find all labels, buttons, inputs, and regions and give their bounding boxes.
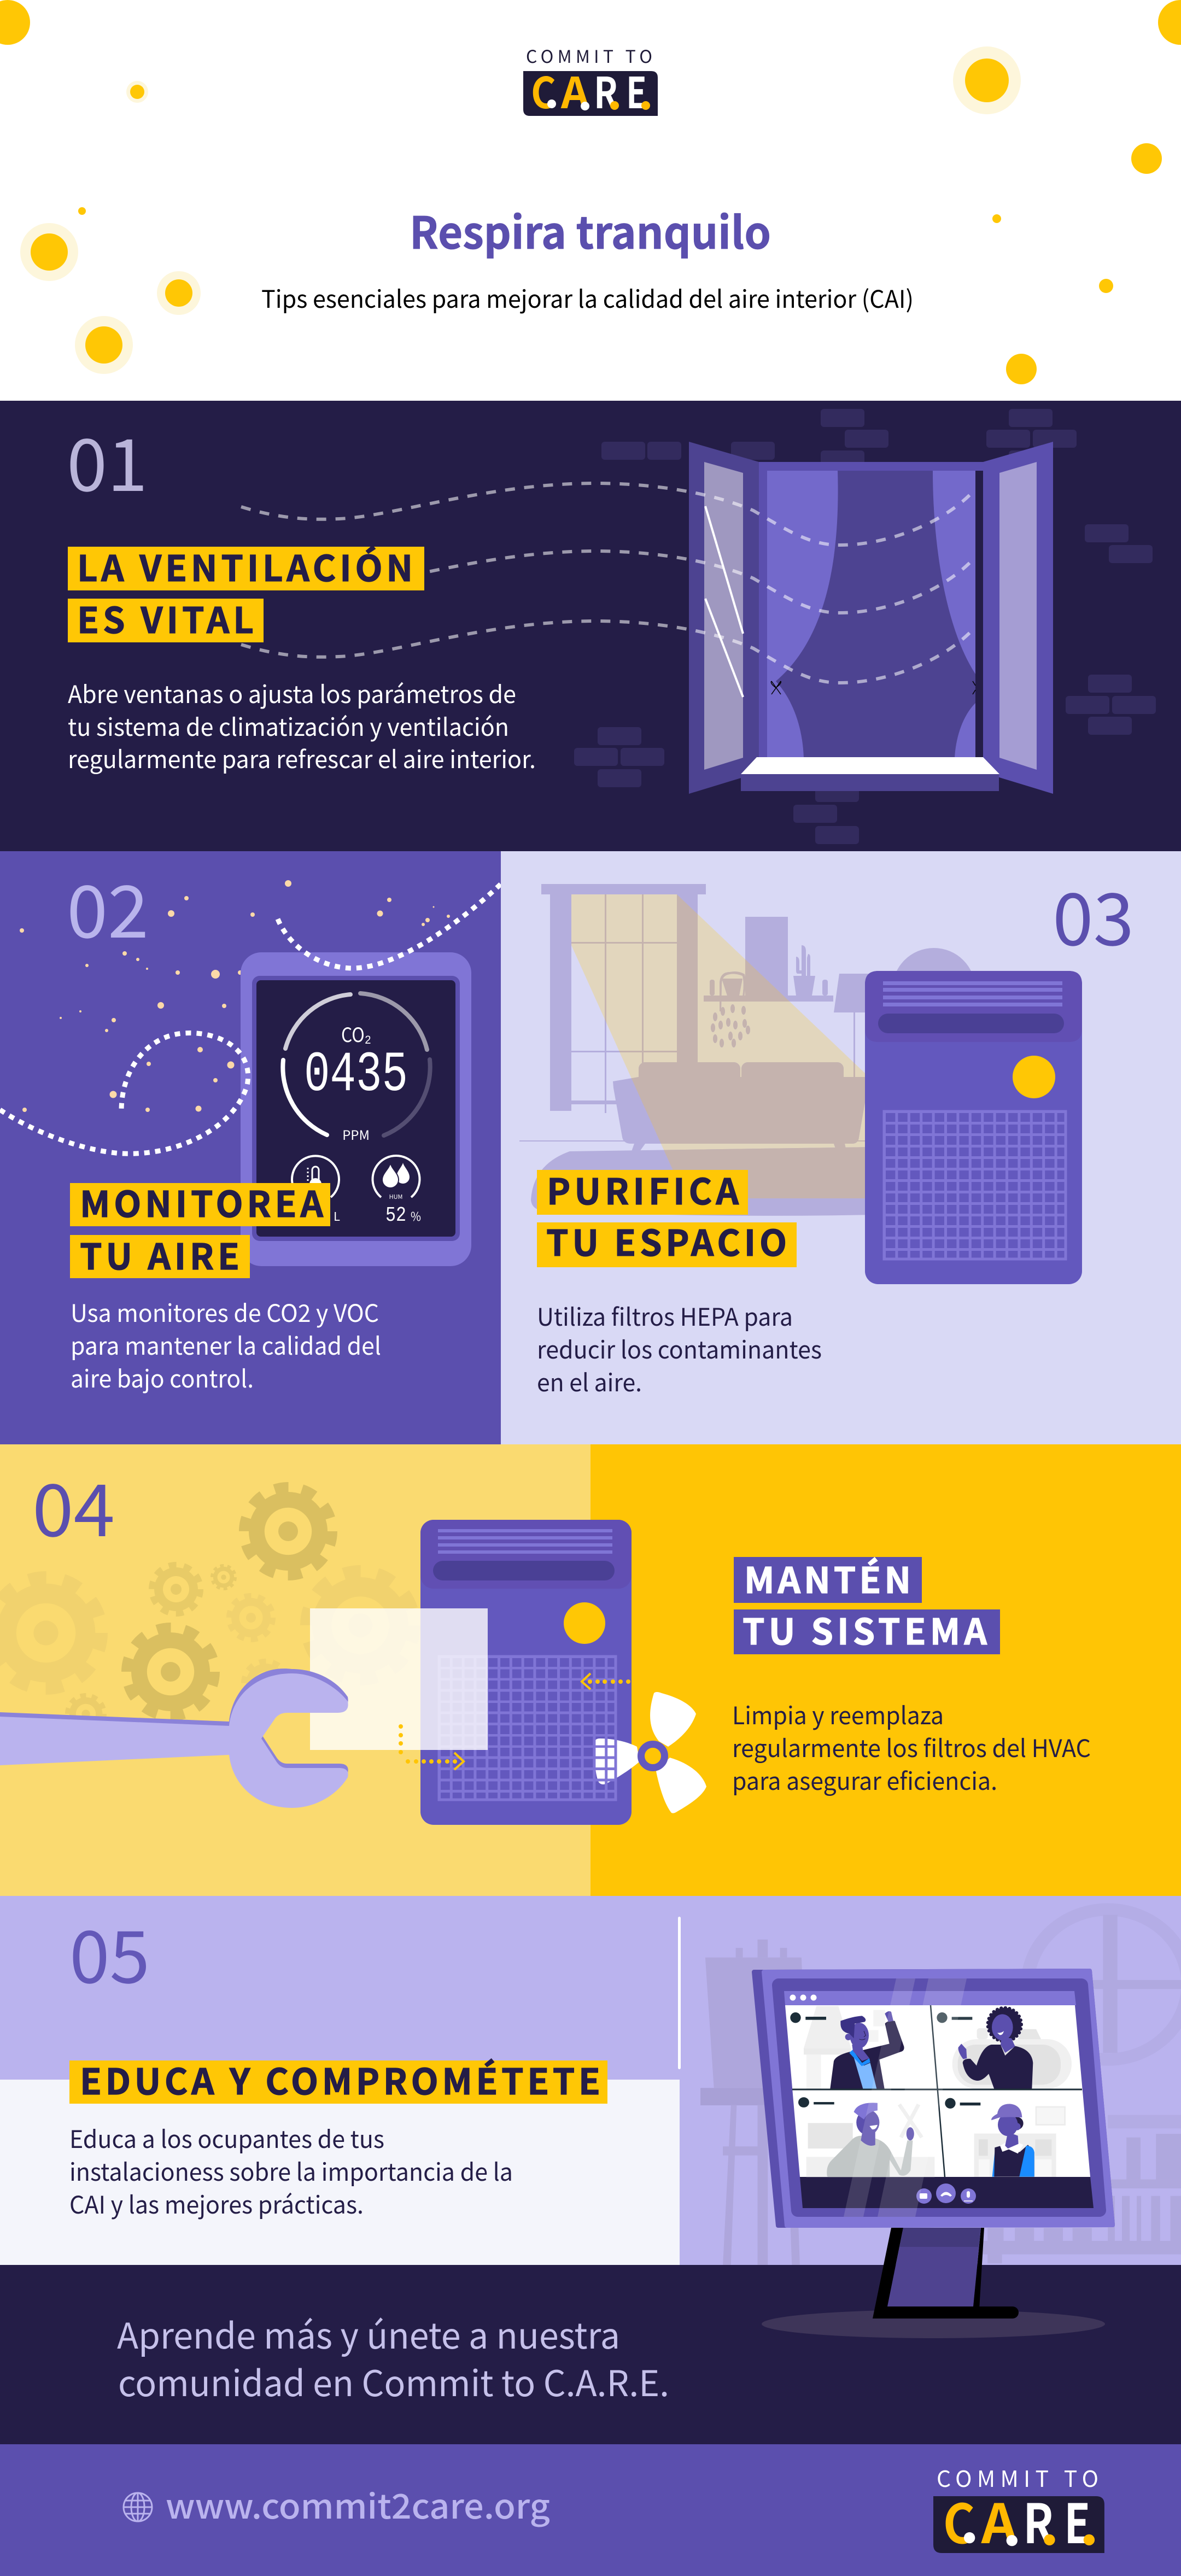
fan blades [594, 1692, 706, 1813]
PPM label: PPM [342, 1125, 370, 1144]
CO2 label: CO₂ [341, 1020, 371, 1048]
paragraph: Usa monitores de CO2 y VOC [71, 1294, 379, 1329]
paragraph: Educa a los ocupantes de tus [69, 2120, 384, 2155]
heading tag: EDUCA Y COMPROMÉTETE [80, 2053, 600, 2105]
paragraph: Utiliza filtros HEPA para [537, 1298, 793, 1333]
humidity gauge: HUM [389, 1192, 402, 1201]
paragraph: Limpia y reemplaza [732, 1696, 944, 1731]
illustration: living room silhouette [519, 884, 975, 1216]
illustration: video call monitor [754, 1971, 1113, 2226]
number 02: 02 [67, 854, 149, 959]
wrench [0, 1668, 348, 1808]
panel: 01 ventilation [0, 401, 1181, 851]
panel: 02 monitor [0, 851, 501, 1444]
icon: globe [124, 2493, 152, 2521]
panel: 04 maintenance [0, 1444, 1181, 1896]
temperature gauge: L [334, 1207, 340, 1225]
background silhouettes: easel, round window, bookshelf [700, 1910, 1181, 2265]
paragraph [68, 675, 536, 775]
heading tag line 1: MANTÉN [744, 1552, 911, 1603]
gauge arcs [283, 993, 430, 1135]
logo: Commit to CARE [933, 2461, 1104, 2559]
logo: Commit to CARE: COMMIT TO [526, 43, 652, 68]
panel: footer [0, 2444, 1181, 2576]
replacement filter sheet [310, 1608, 488, 1750]
illustration: air flow lines [241, 483, 972, 683]
participant 4 [945, 2098, 1065, 2177]
decorative yellow dots [0, 0, 1181, 384]
humidity gauge: % [411, 1207, 421, 1225]
paragraph: CAI y las mejores prácticas. [69, 2186, 364, 2221]
filter grid [438, 1655, 617, 1801]
participant 1 [790, 2006, 904, 2089]
heading tag line 1: LA VENTILACIÓN [77, 540, 413, 592]
paragraph [732, 1696, 1091, 1797]
number 05: 05 [69, 1900, 150, 2004]
dotted air trail [0, 884, 501, 1154]
website: www.commit2care.org [166, 2479, 550, 2528]
logo: Commit to CARE [523, 43, 658, 121]
screen reflection [844, 1978, 967, 2217]
paragraph [69, 2120, 513, 2221]
temperature gauge [292, 1156, 340, 1225]
paragraph: aire bajo control. [71, 1360, 254, 1395]
HVAC unit [420, 1520, 632, 1825]
text: call to action: Aprende más y únete a nuestra [117, 2308, 620, 2359]
right shutter [983, 442, 1053, 794]
paragraph: para mantener la calidad del [71, 1327, 381, 1362]
paragraph: regularmente los filtros del HVAC [732, 1729, 1091, 1764]
call controls [916, 2183, 976, 2204]
logo: Commit to CARE: COMMIT TO [937, 2461, 1098, 2493]
humidity gauge [373, 1156, 421, 1227]
paragraph: regularmente para refrescar el aire interior. [68, 740, 536, 775]
text: call to action: comunidad en Commit to C.A.R.E. [118, 2355, 669, 2407]
brick wall pattern [574, 409, 1156, 844]
paragraph: Abre ventanas o ajusta los parámetros de [68, 675, 516, 710]
paragraph [537, 1298, 822, 1398]
paragraph: tu sistema de climatización y ventilación [68, 708, 509, 743]
paragraph: reducir los contaminantes [537, 1331, 822, 1366]
title: Respira tranquilo [410, 198, 771, 262]
illustration: open window [689, 442, 1053, 794]
heading tag line 2: TU AIRE [80, 1228, 239, 1280]
dotted arrows [399, 1673, 630, 1770]
participant 2 [937, 2008, 1072, 2089]
fan hub [641, 1744, 665, 1768]
window sill [741, 757, 999, 774]
number 04: 04 [32, 1453, 115, 1558]
panel: header [0, 0, 1181, 401]
left shutter [689, 442, 759, 794]
heading tag line 2: TU ESPACIO [546, 1215, 787, 1266]
air quality monitor device [241, 952, 471, 1266]
grid dividers [792, 2005, 1082, 2177]
subtitle: Tips esenciales para mejorar la calidad del aire interior (CAI) [261, 280, 914, 315]
panel: call to action band [0, 2228, 1181, 2444]
participant 3 [798, 2097, 934, 2177]
heading tag line 2: TU SISTEMA [742, 1603, 987, 1655]
air particles [20, 880, 450, 1112]
humidity gauge: 52 [385, 1204, 406, 1227]
panel: 05 education [0, 1896, 1181, 2265]
number 03: 03 [1053, 862, 1134, 967]
monitor stand [873, 2228, 1019, 2319]
air purifier [865, 971, 1082, 1284]
text: call to action [117, 2308, 669, 2407]
paragraph: instalacioness sobre la importancia de la [69, 2153, 513, 2188]
panel: 03 purifier [501, 851, 1181, 1444]
illustration: gears [0, 1488, 413, 1732]
monitor shadow [762, 2310, 1105, 2338]
number 01: 01 [67, 408, 148, 512]
CO2 reading: 0435 [304, 1043, 408, 1108]
heading tag line 2: ES VITAL [77, 592, 254, 643]
paragraph [71, 1294, 381, 1395]
paragraph: en el aire. [537, 1363, 642, 1398]
paragraph: para asegurar eficiencia. [732, 1762, 997, 1797]
heading tag line 1: PURIFICA [547, 1163, 739, 1215]
heading tag line 1: MONITOREA [80, 1176, 323, 1227]
